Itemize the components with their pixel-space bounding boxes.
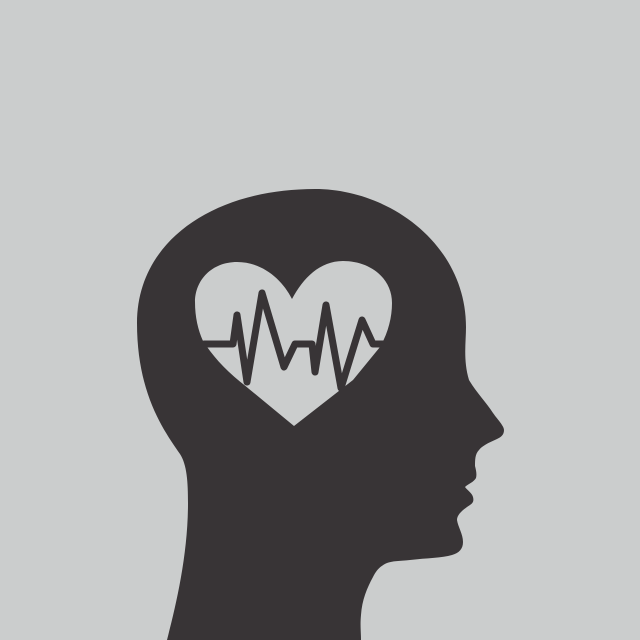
head silhouette in profile: [137, 189, 504, 640]
heart cut-out: [195, 261, 392, 426]
pulse line: [204, 293, 386, 388]
